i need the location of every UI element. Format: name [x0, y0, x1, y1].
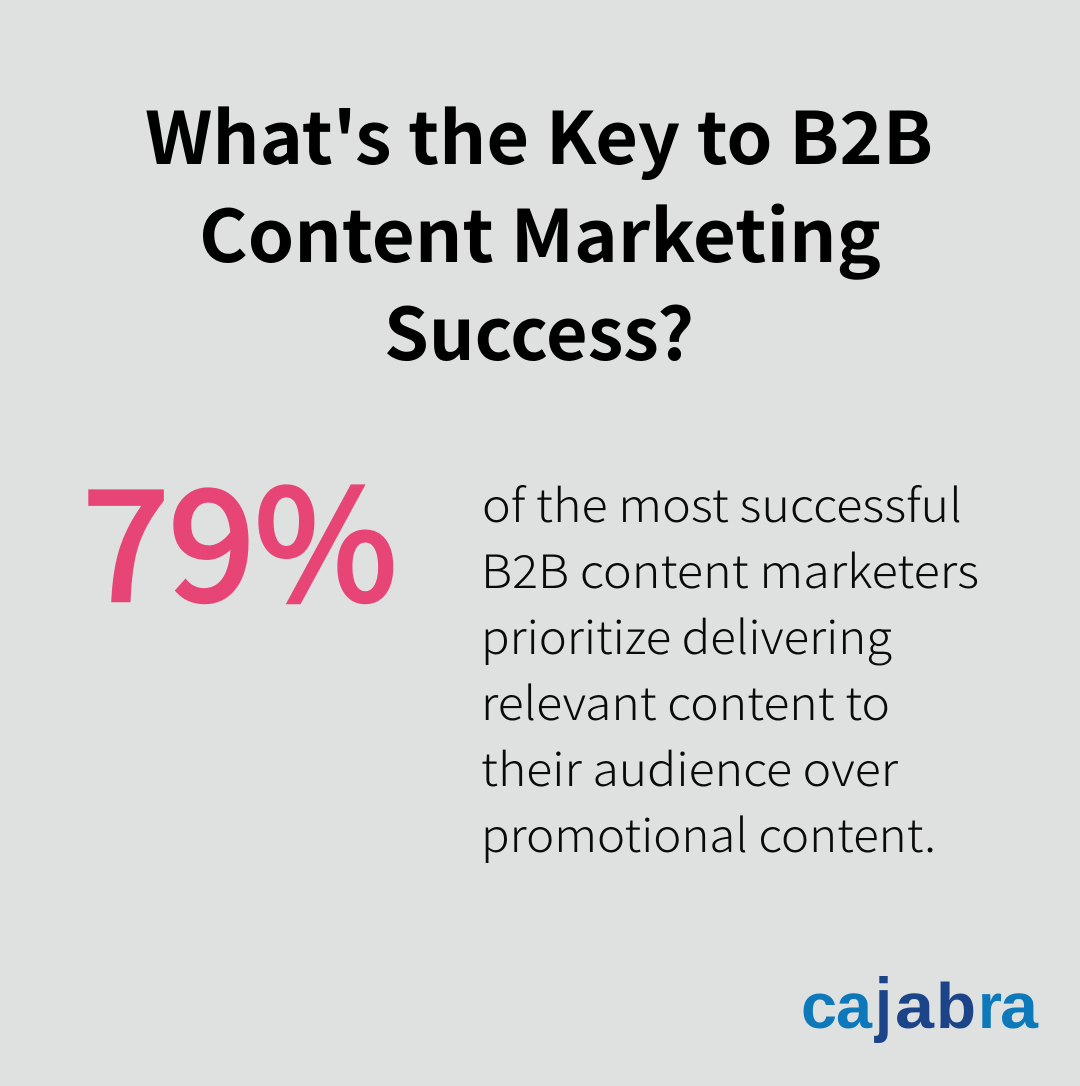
- statistic description: relevant content to: [481, 668, 890, 734]
- logo: cajabra: j: [873, 965, 892, 1044]
- statistic description: B2B content marketers: [481, 536, 979, 602]
- logo: cajabra: b: [936, 970, 976, 1042]
- statistic description: prioritize delivering: [481, 602, 892, 668]
- logo: cajabra: a: [1000, 970, 1038, 1042]
- big statistic: 79%: 79%: [83, 424, 397, 644]
- logo: cajabra: a: [895, 970, 934, 1042]
- statistic description: their audience over: [481, 734, 898, 800]
- statistic description: of the most successful: [482, 470, 962, 536]
- logo: cajabra: r: [978, 970, 1002, 1042]
- logo: cajabra: c: [801, 970, 837, 1042]
- title: Content Marketing: [199, 178, 881, 283]
- title: [145, 80, 933, 381]
- logo: cajabra: [801, 965, 1038, 1044]
- title: Success?: [384, 276, 694, 381]
- title: What's the Key to B2B: [145, 80, 933, 185]
- logo: cajabra: a: [836, 970, 872, 1042]
- statistic description: promotional content.: [481, 800, 936, 866]
- statistic description: [481, 470, 979, 866]
